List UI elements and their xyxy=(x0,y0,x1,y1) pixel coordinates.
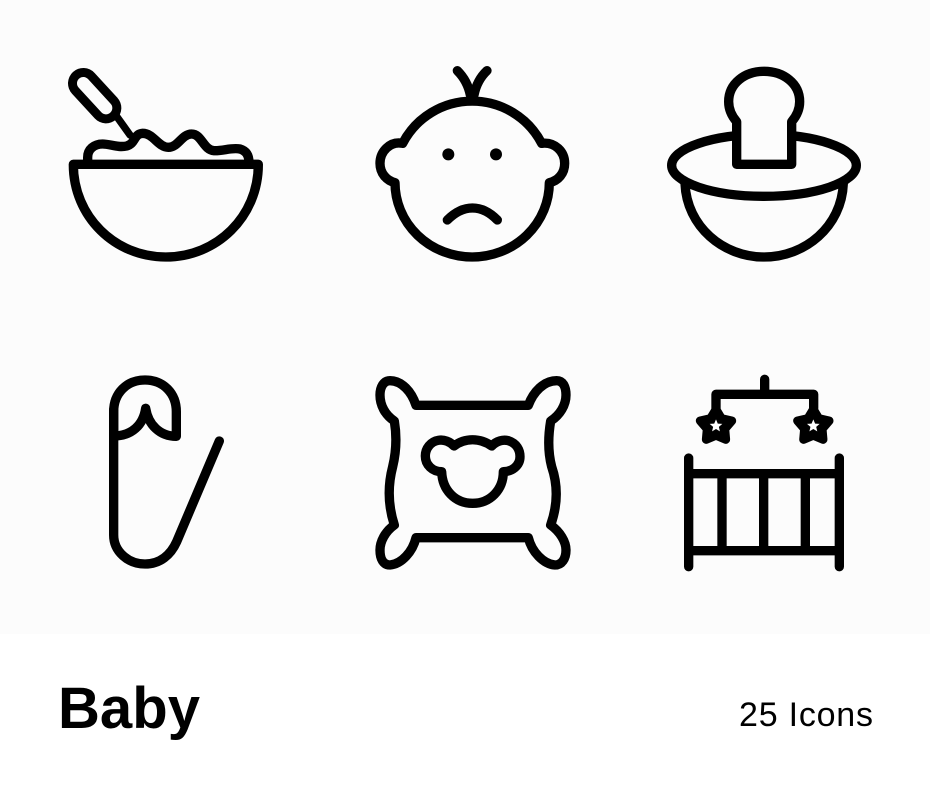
icon: safety pin xyxy=(114,380,219,564)
title: Baby xyxy=(58,676,200,741)
mobile star right xyxy=(797,409,829,439)
icon: porridge bowl with spoon xyxy=(73,83,258,257)
icon count label: 25 Icons xyxy=(739,696,873,734)
mobile star left xyxy=(700,409,732,439)
icon: pillow with teddy bear xyxy=(380,381,566,565)
icon: sad baby face xyxy=(380,71,565,257)
icon: crib with star mobile xyxy=(689,379,839,567)
icon: pacifier xyxy=(672,71,856,257)
